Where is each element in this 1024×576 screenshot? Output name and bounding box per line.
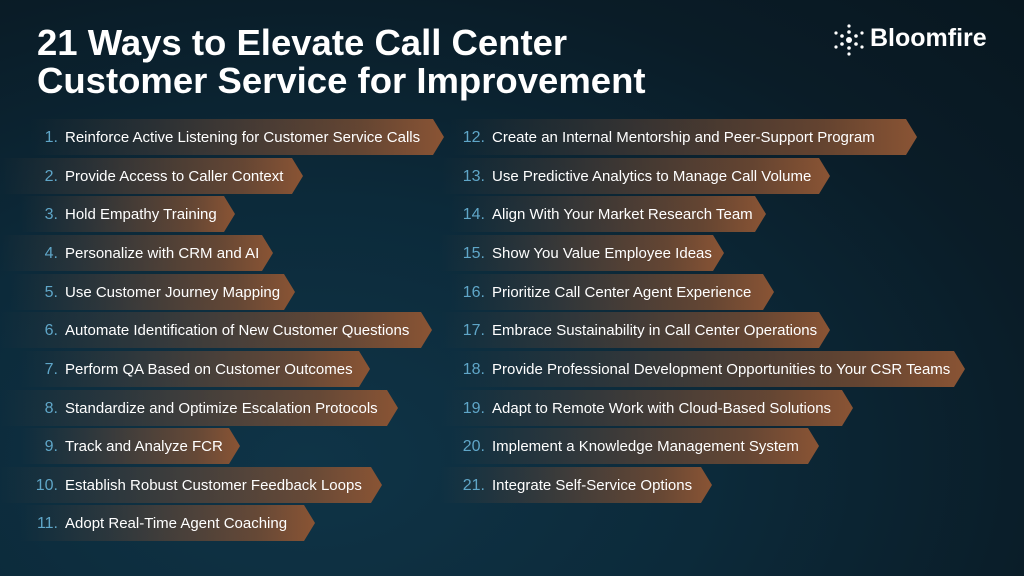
list: items 1-21: Show You Value Employee Ideas	[492, 245, 712, 262]
list: items 1-21: 8.	[45, 400, 58, 417]
list: items 1-21: 17.	[463, 322, 485, 339]
list: items 1-21: 3.	[45, 206, 58, 223]
list: items 1-21	[22, 119, 965, 541]
list: items 1-21: Adopt Real-Time Agent Coaching	[65, 515, 287, 532]
list: items 1-21: 2.	[45, 168, 58, 185]
list: items 1-21: Provide Access to Caller Context	[65, 168, 283, 185]
list: items 1-21: Use Customer Journey Mapping	[65, 284, 280, 301]
list: items 1-21: Perform QA Based on Customer Outcomes	[65, 361, 353, 378]
list: items 1-21: 16.	[463, 284, 485, 301]
list: items 1-21: Prioritize Call Center Agent Experience	[492, 284, 751, 301]
logo: Bloomfire	[834, 24, 987, 56]
list: items 1-21: Hold Empathy Training	[65, 206, 217, 223]
list: items 1-21: 4.	[45, 245, 58, 262]
title: Customer Service for Improvement	[37, 60, 646, 101]
title: 21 Ways to Elevate Call Center	[37, 22, 567, 63]
list: items 1-21: 21.	[463, 477, 485, 494]
list: items 1-21: 5.	[45, 284, 58, 301]
list: items 1-21: Personalize with CRM and AI	[65, 245, 259, 262]
list: items 1-21: Integrate Self-Service Options	[492, 477, 692, 494]
list: items 1-21: 13.	[463, 168, 485, 185]
list: items 1-21: 11.	[37, 515, 58, 532]
list: items 1-21: Provide Professional Development Opportunities to Your CSR Teams	[492, 361, 950, 378]
list: items 1-21: Automate Identification of New Customer Questions	[65, 322, 409, 339]
list: items 1-21: 10.	[36, 477, 58, 494]
list: items 1-21: Reinforce Active Listening for Customer Service Calls	[65, 129, 420, 146]
list: items 1-21: 9.	[45, 438, 58, 455]
list: items 1-21: 12.	[463, 129, 485, 146]
title	[37, 22, 646, 101]
list: items 1-21: 15.	[463, 245, 485, 262]
list: items 1-21: 19.	[463, 400, 485, 417]
list: items 1-21: 6.	[45, 322, 58, 339]
list: items 1-21: Embrace Sustainability in Call Center Operations	[492, 322, 817, 339]
list: items 1-21: Align With Your Market Research Team	[492, 206, 753, 223]
list: items 1-21: 1.	[45, 129, 58, 146]
logo: Bloomfire: Bloomfire	[870, 24, 987, 52]
list: items 1-21: 14.	[463, 206, 485, 223]
list: items 1-21: 20.	[463, 438, 485, 455]
list: items 1-21: Establish Robust Customer Feedback Loops	[65, 477, 362, 494]
list: items 1-21: Track and Analyze FCR	[65, 438, 223, 455]
list: items 1-21: 7.	[45, 361, 58, 378]
list: items 1-21: Implement a Knowledge Management System	[492, 438, 799, 455]
list: items 1-21: Adapt to Remote Work with Cloud-Based Solutions	[492, 400, 831, 417]
list: items 1-21: 18.	[463, 361, 485, 378]
list: items 1-21: Create an Internal Mentorship and Peer-Support Program	[492, 129, 875, 146]
list: items 1-21: Standardize and Optimize Escalation Protocols	[65, 400, 378, 417]
list: items 1-21: Use Predictive Analytics to Manage Call Volume	[492, 168, 811, 185]
